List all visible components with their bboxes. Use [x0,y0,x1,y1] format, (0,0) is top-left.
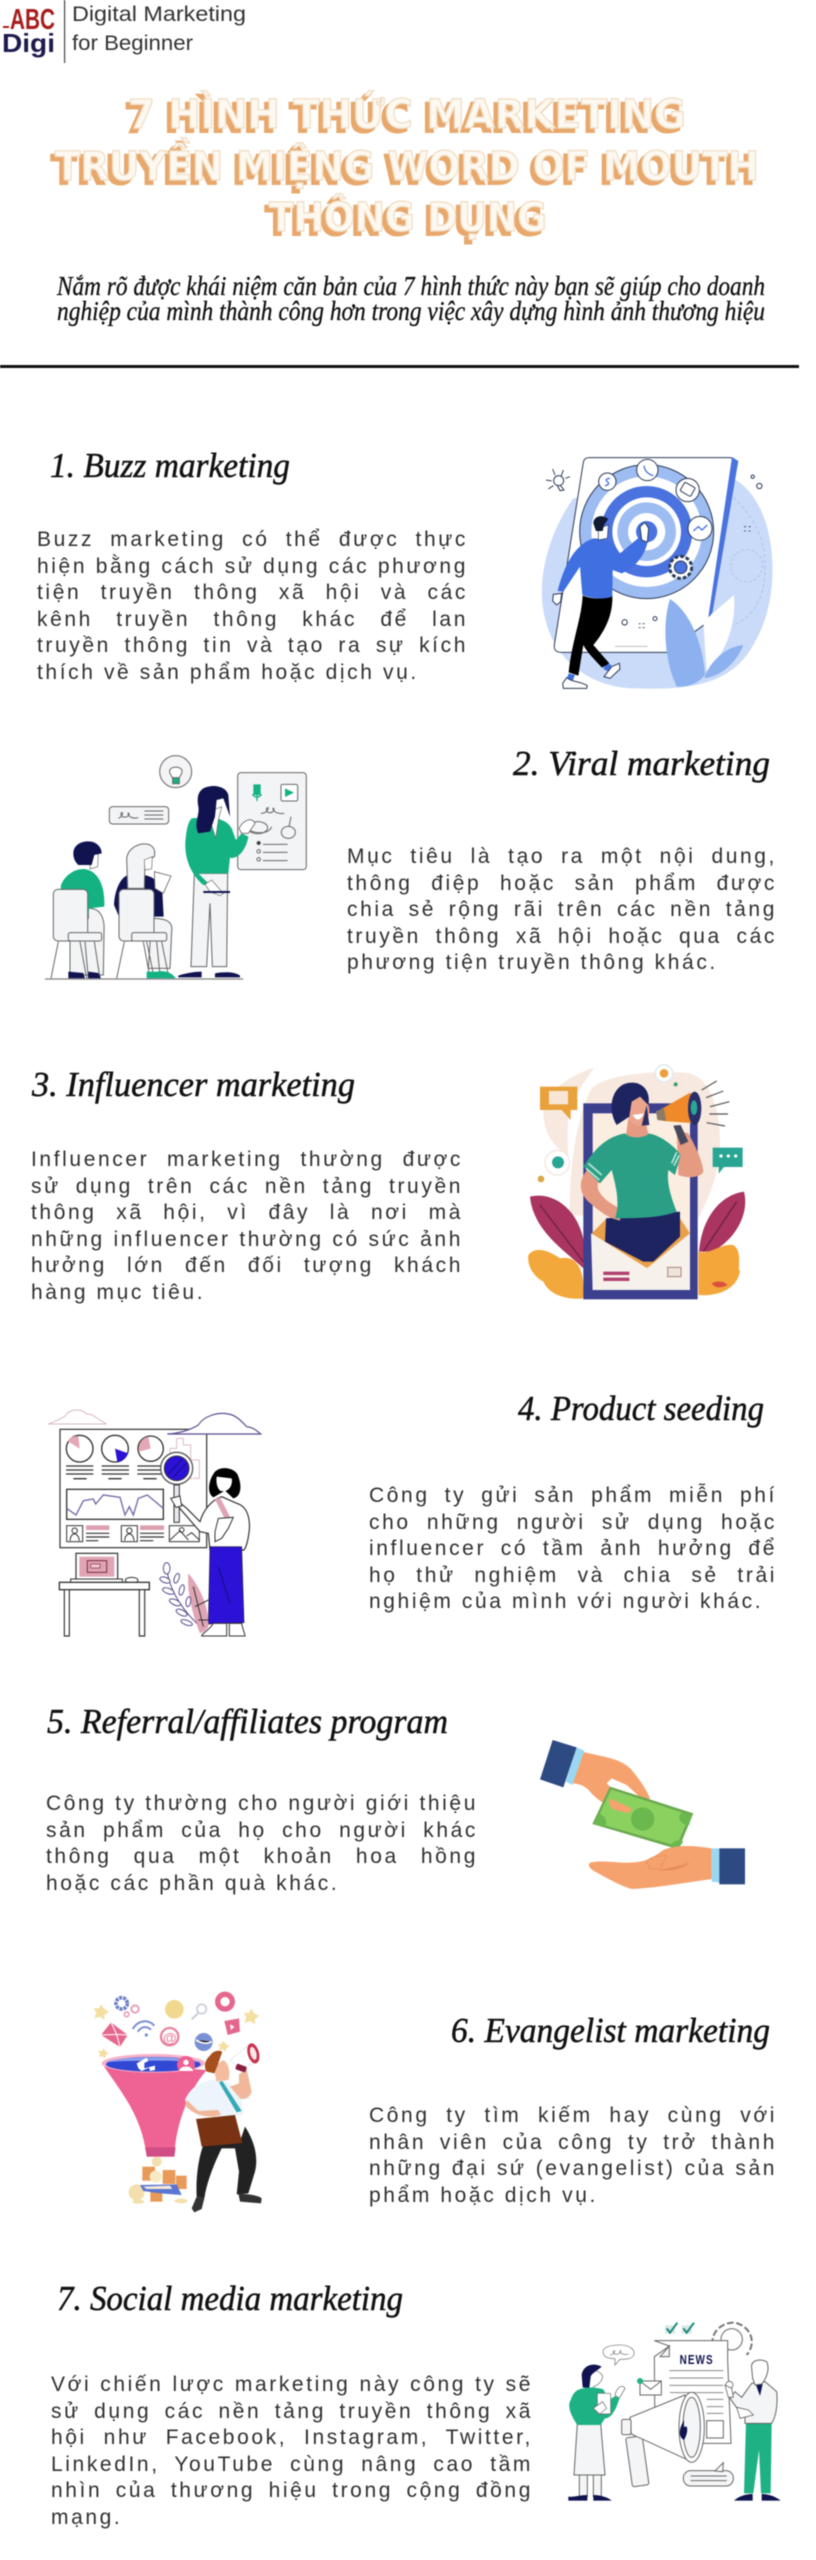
text block: những influencer thường có sức ảnh [31,1228,463,1250]
text block: Công ty tìm kiếm hay cùng với [369,2104,777,2127]
heading: 1. Buzz marketing: 1. Buzz marketing [50,446,290,485]
woman [177,1497,249,1550]
panel: 6. Evangelist marketing [93,1990,777,2213]
divider rule [0,365,799,368]
text block: kênh truyền thông khác để lan [37,608,468,630]
panel: 3. Influencer marketing [30,1064,746,1304]
panel: 4. Product seeding [48,1390,777,1638]
text block [36,528,468,684]
icon: hands exchanging money [540,1739,746,1890]
logo: ABC Digi [2,0,246,64]
text block: Công ty thường cho người giới thiệu [46,1792,478,1815]
text block: hàng mục tiêu. [31,1280,205,1304]
logo: ABC Digi: Digital Marketing [72,3,246,26]
text block: Buzz marketing có thể được thực [37,528,468,551]
icon: target illustration [541,456,773,690]
text block: nhân viên của công ty trở thành [369,2130,777,2154]
logo: ABC Digi: for Beginner [72,32,193,55]
desk and laptop [76,1553,118,1579]
text block [369,2104,777,2208]
seated man [70,908,104,975]
text block: hưởng lớn đến đối tượng khách [31,1254,463,1277]
text block: hiện bằng cách sử dụng các phương [37,554,468,578]
text block: Công ty gửi sản phẩm miễn phí [369,1484,777,1507]
text block: những đại sứ (evangelist) của sản [369,2157,777,2180]
text block: sử dụng trên các nền tảng truyền [31,1174,463,1198]
text block: thông xã hội, vì đây là nơi mà [31,1201,463,1224]
text block [46,1792,478,1896]
title: 7 HÌNH THỨC MARKETING [124,94,682,142]
man [744,2422,772,2493]
text block: truyền thông xã hội hoặc qua các [347,924,777,948]
panel: 1. Buzz marketing [36,446,773,690]
heading: 2. Viral marketing: 2. Viral marketing [513,744,770,783]
text block: thông điệp hoặc sản phẩm được [347,872,777,894]
text block: truyền thông tin và tạo ra sự kích [37,634,468,657]
businessman [196,2127,256,2198]
text block: thích về sản phẩm hoặc dịch vụ. [37,660,419,684]
text block: sử dụng các nền tảng truyền thông xã [51,2400,533,2422]
icon: influencer with megaphone illustration [527,1064,746,1300]
text block: cho những người sử dụng hoặc [369,1510,777,1534]
text block: họ thử nghiệm và chia sẻ trải [369,1564,777,1586]
text block: thông qua một khoản hoa hồng [46,1845,478,1868]
icon: analytics board illustration [48,1409,262,1638]
woman [574,2423,605,2497]
panel: 5. Referral/affiliates program [46,1702,746,1896]
title: 7 HÌNH THỨC MARKETING [128,90,686,138]
text block: nghiệm của mình với người khác. [369,1590,763,1613]
icon: classroom presentation illustration [44,754,308,980]
subtitle [56,271,765,327]
panel: 2. Viral marketing [44,744,777,980]
text block [50,2373,533,2530]
text block: mạng. [51,2506,122,2528]
heading: 7. Social media marketing: 7. Social media marketing [57,2279,403,2318]
icon: funnel and businessman illustration [93,1990,262,2213]
heading: 5. Referral/affiliates program: 5. Referral/affiliates program [47,1702,448,1741]
plant [188,1573,209,1633]
text block [30,1148,463,1304]
title [50,90,759,246]
text block: LinkedIn, YouTube cùng nâng cao tầm [51,2452,533,2476]
text block: Với chiến lược marketing này công ty sẽ [51,2373,533,2396]
title: TRUYỀN MIỆNG WORD OF MOUTH [51,140,755,194]
text block: Influencer marketing thường được [31,1148,463,1171]
title: THÔNG DỤNG [265,197,543,245]
logo: ABC Digi: Digi [2,28,55,58]
text block: sản phẩm của họ cho người khác [46,1818,478,1842]
icon: news megaphone illustration [568,2321,781,2502]
text block [346,845,777,974]
text block: hoặc các phần quà khác. [46,1872,339,1894]
text block: chia sẻ rộng rãi trên các nền tảng [347,898,777,921]
heading: 6. Evangelist marketing: 6. Evangelist marketing [451,2011,770,2050]
text block: nhìn của thương hiệu trong cộng đồng [51,2479,533,2502]
text block: influencer có tầm ảnh hưởng để [369,1537,777,1560]
logo: ABC Digi: ABC [10,4,55,36]
text block: phương tiện truyền thông khác. [347,951,718,974]
seated woman [148,918,172,968]
title: TRUYỀN MIỆNG WORD OF MOUTH [55,136,759,190]
text block: phẩm hoặc dịch vụ. [369,2184,598,2206]
heading: 3. Influencer marketing: 3. Influencer marketing [31,1065,355,1104]
text block: Mục tiêu là tạo ra một nội dung, [347,845,777,868]
text block [369,1482,777,1614]
text block: tiện truyền thông xã hội và các [37,581,468,604]
title: THÔNG DỤNG [269,193,547,241]
icon: news megaphone illustration: NEWS [680,2353,714,2367]
icon: funnel and businessman illustration: @ [163,2029,176,2045]
text block: hội như Facebook, Instagram, Twitter, [51,2426,533,2449]
heading: 4. Product seeding: 4. Product seeding [518,1390,764,1428]
standing woman [191,873,228,967]
panel: 7. Social media marketing [50,2279,781,2530]
